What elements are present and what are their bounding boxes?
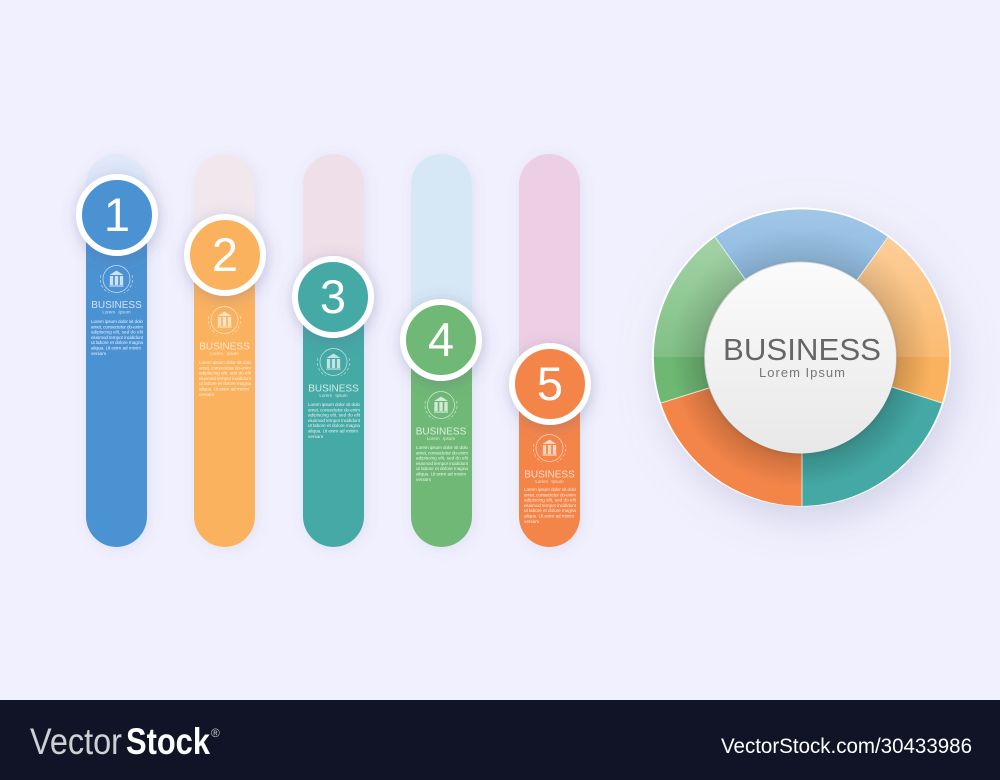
footer logo: Stock xyxy=(126,721,210,762)
step 5 body text: ut labore et dolore magna xyxy=(524,508,576,513)
center subheading: Lorem Ipsum xyxy=(759,365,845,380)
step 1 subheading: Lorem Ipsum xyxy=(102,310,131,314)
step 3 subheading: Lorem Ipsum xyxy=(319,393,348,398)
segment: orange xyxy=(661,388,802,506)
step 1 body text: amet, consectetur do-enim xyxy=(91,324,143,329)
step 5 subheading: Lorem Ipsum xyxy=(535,479,564,484)
step 5 body text: Lorem ipsum dolor sit dolo xyxy=(524,487,576,492)
step 2 pill xyxy=(194,154,255,547)
footer id: VectorStock.com/30433986 xyxy=(721,735,972,758)
step 2 column xyxy=(187,154,263,547)
step 3 heading: BUSINESS xyxy=(308,384,359,394)
step 3 column xyxy=(295,154,371,547)
step 5 icon: bank xyxy=(533,434,566,462)
registered mark: ® xyxy=(211,726,220,740)
step 1 number badge: 1 xyxy=(104,188,130,241)
step 3 icon: bank xyxy=(317,348,350,376)
step 5 number badge: 5 xyxy=(537,357,563,410)
step 5 body text: adipiscing elit, sed do elit xyxy=(524,498,577,503)
step 3 body text: amet, consectetur do-enim xyxy=(308,407,360,412)
step 4 number badge: 4 xyxy=(428,313,454,366)
step 5 body text: eiusmod tempor incididunt xyxy=(524,503,577,508)
step 4 column xyxy=(403,154,479,547)
step 2 body text: eiusmod tempor incididunt xyxy=(199,376,252,381)
step 1 body text: eiusmod tempor incididunt xyxy=(91,335,144,340)
step 3 body text xyxy=(308,402,361,439)
step 1 column xyxy=(79,154,155,547)
step 2 body text: Lorem ipsum dolor sit dolo xyxy=(199,360,251,365)
step 1 body text: ut labore et dolore magna xyxy=(91,340,143,345)
step 2 body text: aliqua. Ut enim ad minim xyxy=(199,386,249,392)
step 3 body text: adipiscing elit, sed do elit xyxy=(308,413,361,418)
step 4 icon: bank xyxy=(425,392,457,419)
step 3 number badge xyxy=(295,259,371,335)
step 3 number badge: 3 xyxy=(320,270,346,323)
segment: green xyxy=(654,237,745,403)
background glow behind donut xyxy=(596,152,1000,562)
step 5 body text: amet, consectetur do-enim xyxy=(524,492,576,497)
ring top highlight xyxy=(652,208,950,357)
step 4 number badge xyxy=(403,302,479,378)
center disc xyxy=(705,262,896,454)
footer bar xyxy=(0,700,1000,780)
center heading: BUSINESS xyxy=(723,332,881,367)
step 5 body text xyxy=(524,487,577,524)
step 1 pill xyxy=(86,154,147,547)
step 2 subheading: Lorem Ipsum xyxy=(210,351,239,356)
step 4 body text: aliqua. Ut enim ad minim xyxy=(416,472,466,476)
footer logo: Vector xyxy=(30,721,122,762)
step 3 body text: Lorem ipsum dolor sit dolo xyxy=(308,402,360,407)
step 4 body text: adipiscing elit, sed do elit xyxy=(416,456,469,461)
step 4 heading: BUSINESS xyxy=(416,426,467,438)
step 5 body text: veniam xyxy=(524,519,539,524)
step 3 pill xyxy=(303,154,364,547)
segment dividers xyxy=(661,237,942,506)
step 3 body text: aliqua. Ut enim ad minim xyxy=(308,428,358,434)
step 5 pill xyxy=(519,154,580,547)
step 1 number badge xyxy=(79,177,155,253)
step 5 body text: aliqua. Ut enim ad minim xyxy=(524,514,574,518)
step 5 column xyxy=(512,154,588,547)
step 2 body text: adipiscing elit, sed do elit xyxy=(199,371,252,376)
step 4 subheading: Lorem Ipsum xyxy=(427,436,455,441)
step 1 body text: Lorem ipsum dolor sit dolo xyxy=(91,319,143,324)
step 2 icon: bank xyxy=(208,306,241,334)
step 2 body text xyxy=(199,360,252,397)
step 1 body text: adipiscing elit, sed do elit xyxy=(91,330,144,335)
step 4 body text: Lorem ipsum dolor sit dolo xyxy=(416,445,468,450)
segment: light orange xyxy=(857,237,949,403)
step 1 body text: veniam xyxy=(91,351,106,356)
step 4 body text: eiusmod tempor incididunt xyxy=(416,461,469,466)
step 5 heading: BUSINESS xyxy=(524,470,575,480)
step 4 body text: veniam xyxy=(416,477,431,482)
step 4 body text xyxy=(416,445,469,482)
step 1 body text xyxy=(91,319,144,356)
step 2 number badge xyxy=(187,217,263,293)
step 4 pill xyxy=(411,154,472,547)
step 4 body text: ut labore et dolore magna xyxy=(416,466,468,471)
step 2 body text: amet, consectetur do-enim xyxy=(199,365,251,370)
step 2 number badge: 2 xyxy=(212,228,238,281)
ring inner shading xyxy=(653,208,950,506)
footer logo xyxy=(30,721,210,762)
step 1 heading: BUSINESS xyxy=(91,300,142,311)
donut base and shadow xyxy=(652,208,951,506)
step 2 body text: veniam xyxy=(199,392,214,397)
step 4 body text: amet, consectetur do-enim xyxy=(416,450,468,455)
step 1 body text: aliqua. Ut enim ad minim xyxy=(91,346,141,350)
segment: teal xyxy=(802,387,942,506)
step 5 number badge xyxy=(512,346,588,422)
step 3 body text: ut labore et dolore magna xyxy=(308,423,360,428)
segment: blue xyxy=(715,209,888,280)
donut chart xyxy=(652,208,951,506)
step 2 heading: BUSINESS xyxy=(199,342,250,352)
step 3 body text: eiusmod tempor incididunt xyxy=(308,418,361,423)
step 3 body text: veniam xyxy=(308,434,323,439)
step 1 icon: bank xyxy=(100,266,133,293)
step 2 body text: ut labore et dolore magna xyxy=(199,381,251,386)
